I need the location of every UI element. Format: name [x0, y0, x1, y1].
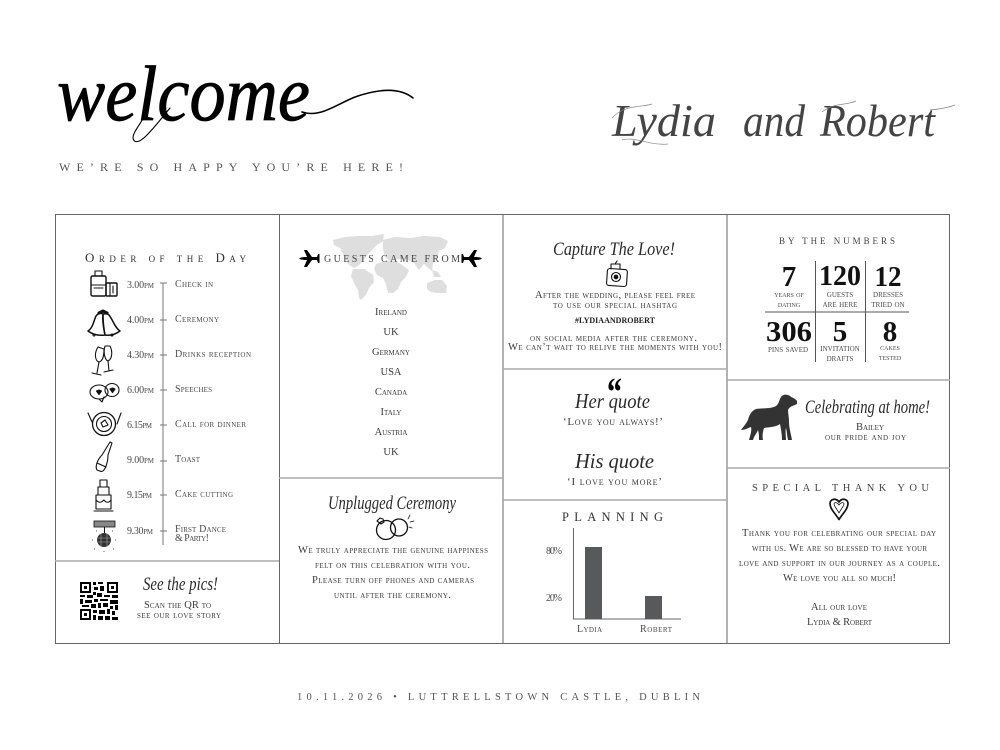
axis value labels: 20% — [546, 593, 562, 604]
icon: champagne bottle — [96, 442, 112, 472]
heading: planning: PLANNING — [562, 510, 663, 524]
body text: love and support in our journey as a couple. — [739, 558, 940, 569]
heading: order of the day: Order of the Day — [85, 250, 246, 265]
panel: celebrating at home — [741, 395, 930, 443]
body text: We can’t wait to relive the moments with you! — [508, 342, 722, 353]
signature: Lydia & Robert — [807, 617, 873, 628]
QR caption: Scan the QR to — [144, 600, 211, 611]
panel: quotes — [563, 369, 663, 488]
footer: date and venue: 10.11.2026 • LUTTRELLSTOWN CASTLE, DUBLIN — [297, 692, 700, 703]
heading: capture the love: Capture The Love! — [553, 239, 675, 260]
body text: with us. We are so blessed to have your — [752, 543, 927, 554]
icon: wedding bells — [88, 311, 120, 336]
couple names: Robert — [819, 95, 936, 146]
country list: Italy — [381, 407, 401, 418]
icon: speech bubbles — [90, 384, 119, 402]
couple names: and — [743, 95, 806, 146]
country list: Germany — [372, 347, 410, 358]
schedule times: 4.30pm — [127, 350, 155, 361]
stat: cakes tested: cakes — [880, 342, 900, 352]
bar: Lydia — [585, 547, 602, 619]
icon: suitcases — [91, 271, 117, 296]
axis value labels — [546, 546, 562, 604]
stat: guests are here: 120 — [819, 260, 861, 292]
pet caption: our pride and joy — [825, 432, 906, 443]
stat: invitation drafts: invitation — [820, 343, 860, 354]
panel: planning — [546, 510, 681, 635]
body text: We truly appreciate the genuine happiness — [298, 545, 488, 556]
stats grid lines — [765, 261, 909, 362]
panel: by the numbers — [765, 236, 909, 364]
icon: wedding rings — [376, 515, 414, 540]
body text: felt on this celebration with you. — [315, 560, 470, 571]
country list: UK — [383, 447, 399, 458]
schedule labels: Ceremony — [175, 314, 219, 325]
stat: guests are here: guests — [827, 289, 853, 300]
panel: special thank you — [739, 483, 940, 628]
schedule times: 6.00pm — [127, 385, 155, 396]
body text: After the wedding, please feel free — [535, 290, 695, 301]
schedule labels: Drinks reception — [175, 349, 251, 360]
stat: pins saved: 306 — [766, 316, 812, 348]
body text: #LYDIAANDROBERT — [575, 316, 656, 325]
timeline — [160, 283, 167, 545]
body text: Thank you for celebrating our special day — [742, 528, 936, 539]
schedule times: 9.30pm — [127, 526, 154, 537]
stat: pins saved: pins saved — [768, 344, 808, 355]
stat: dresses tried on: 12 — [874, 261, 902, 293]
schedule labels: Call for dinner — [175, 419, 246, 430]
stat: invitation drafts — [820, 316, 860, 364]
icon: heart — [830, 499, 848, 520]
stat: years of dating: years of — [774, 289, 804, 299]
stat: years of dating: 7 — [782, 261, 796, 293]
QR caption — [137, 600, 221, 621]
stat: guests are here: are here — [823, 299, 857, 310]
country list: Ireland — [375, 307, 407, 318]
country list: USA — [380, 367, 402, 378]
heading: his quote: His quote — [574, 449, 654, 473]
heading: her quote: Her quote — [574, 389, 650, 413]
stat: guests are here — [819, 260, 861, 310]
body text: Please turn off phones and cameras — [312, 575, 474, 586]
schedule labels: Speeches — [175, 384, 212, 395]
category labels: Robert — [640, 624, 673, 635]
icon: champagne flutes — [92, 346, 113, 375]
schedule labels: Check in — [175, 279, 213, 290]
schedule times: 4.00pm — [127, 315, 155, 326]
heading: unplugged ceremony: Unplugged Ceremony — [328, 493, 456, 514]
category labels: Lydia — [577, 624, 602, 635]
stat: cakes tested: tested — [879, 352, 902, 362]
body text — [298, 545, 488, 601]
schedule times: 6.15pm — [127, 420, 153, 431]
stat: cakes tested — [879, 316, 902, 362]
schedule labels: & Party! — [175, 533, 209, 544]
title: welcome: welcome — [57, 50, 310, 137]
her quote text: ‘Love you always!’ — [563, 416, 663, 428]
icon: plane left — [299, 250, 320, 267]
signature: All our love — [811, 602, 867, 613]
bar: Robert — [645, 596, 662, 619]
stat: years of dating — [774, 261, 804, 309]
pet caption — [825, 422, 906, 443]
panel: capture the love — [508, 239, 722, 353]
icon: quotation mark: “ — [607, 369, 622, 414]
body text — [739, 528, 940, 584]
world map — [333, 234, 448, 300]
heading: special thank you: SPECIAL THANK YOU — [752, 483, 929, 494]
icon: disco ball and banner — [92, 521, 116, 552]
heading: guests came from: GUESTS CAME FROM — [324, 254, 460, 265]
schedule times: 9.15pm — [127, 490, 153, 501]
heading: see the pics: See the pics! — [143, 574, 218, 595]
stat: invitation drafts: drafts — [827, 353, 854, 364]
icon: dinner plate — [88, 412, 121, 436]
schedule times — [127, 280, 155, 537]
stat: dresses tried on: dresses — [873, 289, 903, 300]
icon: QR code — [80, 582, 118, 620]
QR caption: see our love story — [137, 610, 221, 621]
stat: years of dating: dating — [778, 299, 801, 309]
body text — [508, 290, 722, 353]
body text: to use our special hashtag — [553, 300, 677, 311]
country list: UK — [383, 327, 399, 338]
stat: dresses tried on: tried on — [871, 299, 905, 310]
pet caption: Bailey — [856, 422, 884, 433]
bar chart — [546, 528, 681, 635]
category labels — [577, 624, 673, 635]
body text: until after the ceremony. — [334, 590, 451, 601]
body text: on social media after the ceremony. — [530, 333, 697, 344]
subtitle: WE’RE SO HAPPY YOU’RE HERE! — [59, 160, 403, 174]
schedule times: 9.00pm — [127, 455, 155, 466]
stat: cakes tested: 8 — [883, 316, 897, 348]
icon: camera — [606, 261, 628, 287]
axis value labels: 80% — [546, 546, 562, 557]
panel: unplugged ceremony — [298, 493, 488, 601]
couple names: Lydia — [611, 95, 716, 146]
stat: dresses tried on — [871, 261, 905, 310]
schedule labels — [175, 279, 251, 544]
icon: dog silhouette — [741, 395, 797, 440]
country list — [372, 307, 410, 458]
stat: invitation drafts: 5 — [833, 316, 847, 348]
schedule labels: Cake cutting — [175, 489, 233, 500]
panel: see the pics — [80, 574, 221, 621]
country list: Austria — [375, 427, 407, 438]
panel: guests came from — [299, 234, 482, 458]
schedule times: 3.00pm — [127, 280, 155, 291]
schedule labels: Toast — [175, 454, 201, 465]
panel: order of the day — [85, 250, 251, 552]
his quote text: ‘I love you more’ — [567, 476, 662, 488]
heading: by the numbers: BY THE NUMBERS — [779, 236, 895, 246]
country list: Canada — [375, 387, 407, 398]
couple names — [611, 95, 955, 146]
body text: We love you all so much! — [783, 573, 896, 584]
icon: tiered cake — [94, 480, 113, 511]
signature — [807, 602, 873, 628]
heading: celebrating at home: Celebrating at home! — [805, 397, 930, 418]
panel grid — [55, 214, 950, 644]
schedule labels: First Dance — [175, 524, 226, 535]
icon: plane right — [462, 250, 482, 267]
